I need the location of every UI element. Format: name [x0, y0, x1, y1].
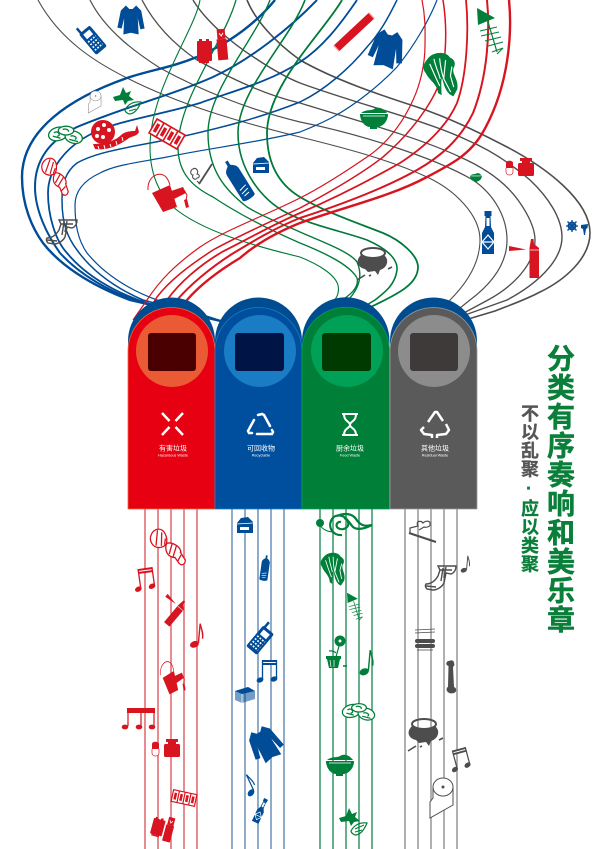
icon: glue top	[509, 239, 539, 278]
icon: phone lower	[246, 621, 278, 655]
panel: recyclable waste bin: Recyclable	[252, 454, 270, 458]
icon: note double lower red	[131, 567, 157, 593]
icon: gears top	[566, 220, 588, 235]
icon: batteries top	[197, 39, 212, 63]
icon: small bowl top	[470, 173, 482, 182]
panel: hazardous waste bin: Hazardous Waste	[158, 454, 188, 458]
icon: cabbage lower	[321, 553, 345, 586]
subtitle: 不以乱聚 ·应以类聚	[519, 404, 539, 573]
icon: recycle triangle	[248, 414, 273, 434]
panel: residual waste bin	[390, 308, 477, 509]
icon: treble clef	[316, 514, 372, 535]
panel: hazardous waste bin	[128, 308, 215, 509]
icon: note double blue	[256, 660, 278, 684]
icon: clam top	[47, 125, 84, 145]
icon: pill and ink lower	[152, 739, 180, 757]
icon: glue lower	[152, 590, 188, 627]
icon: residual tree	[421, 412, 449, 438]
icon: cigarette top	[191, 164, 212, 184]
icon: bulb lower	[145, 527, 193, 566]
icon: film reel top	[91, 120, 139, 149]
icon: clam lower	[341, 702, 376, 722]
icon: bowl top	[360, 108, 388, 129]
icon: note single green	[359, 650, 373, 677]
icon: shirt top left	[117, 6, 145, 34]
panel: recyclable waste bin: 可回收物	[247, 444, 275, 452]
icon: paint bucket top	[148, 174, 189, 212]
staff lines: hazardous	[145, 505, 197, 849]
icon: flower pot	[326, 636, 347, 668]
icon: vegetable top	[113, 87, 141, 114]
icon: fish bone top	[477, 8, 503, 54]
icon: pot lower	[408, 719, 443, 751]
icon: paper stack	[235, 687, 255, 703]
icon: red stick top	[334, 13, 374, 51]
icon: shoe lower	[425, 566, 456, 590]
gray curves	[38, 0, 590, 320]
icon: pill and ink top	[506, 158, 534, 176]
panel: recyclable waste bin	[215, 308, 302, 509]
icon: plastic bottle top	[220, 158, 256, 203]
icon: note single blue	[238, 774, 259, 799]
blue curves	[22, 0, 437, 322]
icon: note single gray upper	[460, 556, 470, 573]
green curves	[150, 0, 418, 312]
icon: bottle lower	[259, 555, 271, 581]
panel: food waste bin: Food Waste	[340, 454, 360, 458]
icon: cabbage top	[422, 52, 458, 99]
panel: hazardous waste bin: 有害垃圾	[159, 444, 187, 452]
icon: bucket lower	[160, 662, 186, 694]
icon: medicine tube top	[216, 29, 228, 60]
staff lines: residual	[405, 505, 457, 849]
icon: batteries lower	[150, 816, 166, 838]
staff lines: food	[320, 505, 372, 849]
panel: food waste bin: 厨余垃圾	[336, 444, 364, 452]
icon: bone	[446, 660, 456, 693]
icon: cigarette lower	[409, 521, 436, 542]
panel: food waste bin	[302, 307, 390, 509]
icon: bowl lower	[326, 755, 354, 776]
icon: sauce bottle top	[482, 211, 494, 254]
icon: shirt lower	[243, 721, 287, 767]
icon: carton lower	[237, 517, 253, 533]
icon: film strip top	[149, 119, 185, 149]
red curves	[133, 0, 510, 320]
icon: shirt top right	[366, 27, 408, 71]
icon: sauce bottle lower	[252, 797, 269, 824]
icon: pot top	[357, 248, 392, 280]
title: 分类有序奏响和美乐章	[544, 344, 575, 634]
staff lines: recyclable	[232, 505, 284, 849]
icon: note single lower red	[189, 624, 203, 649]
icon: hazardous cross	[162, 413, 183, 435]
panel: residual waste bin: 其他垃圾	[421, 444, 449, 452]
icon: film strip lower	[171, 790, 197, 806]
icon: light bulb top	[36, 155, 78, 196]
icon: toilet paper top	[88, 91, 101, 113]
panel: residual waste bin: Residual Waste	[422, 454, 448, 458]
icon: tube lower	[162, 817, 176, 843]
icon: burger	[415, 629, 435, 650]
icon: carton top	[253, 157, 269, 173]
icon: shoe top	[46, 220, 77, 244]
icon: vegetable lower	[339, 808, 367, 835]
icon: toilet paper lower	[430, 778, 453, 818]
icon: hourglass	[342, 414, 358, 435]
icon: triple note	[122, 708, 155, 729]
icon: phone top	[75, 21, 107, 55]
icon: note double gray	[446, 747, 472, 774]
icon: fish bone lower	[347, 593, 363, 620]
panel: bin backs	[128, 297, 477, 345]
